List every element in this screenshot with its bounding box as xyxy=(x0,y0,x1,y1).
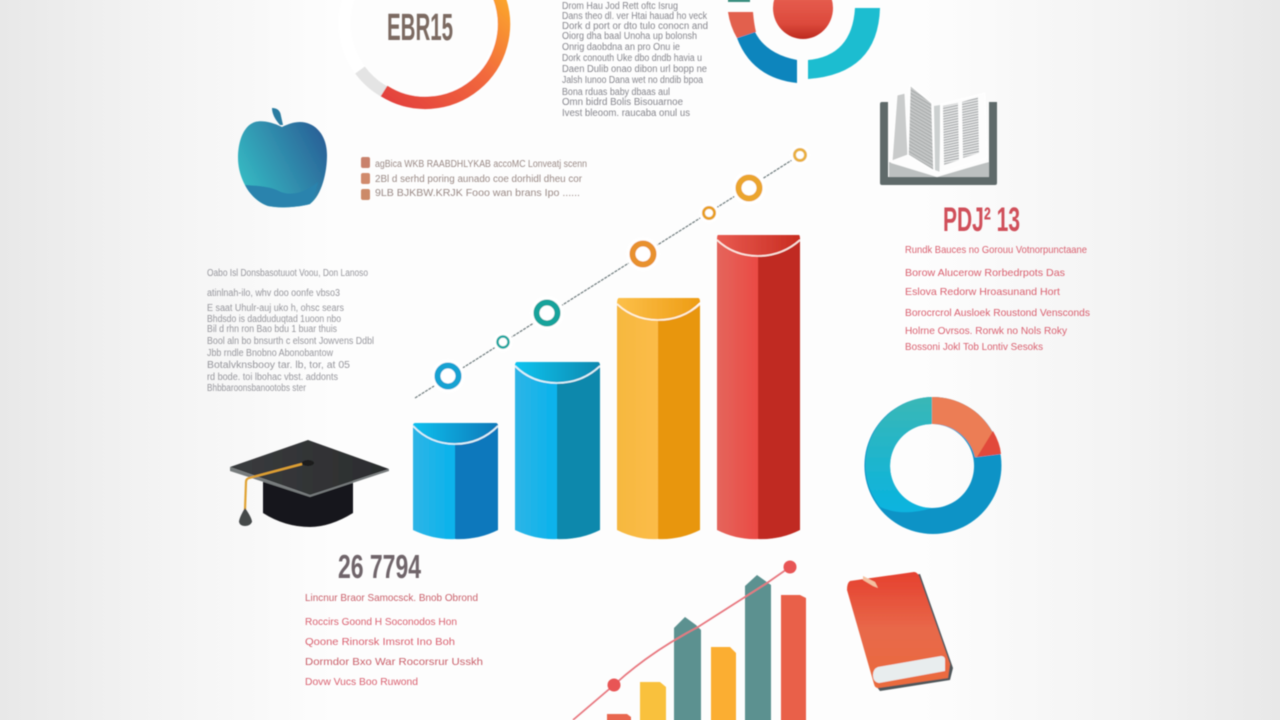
turning page xyxy=(908,85,934,171)
bar 4 xyxy=(711,647,736,720)
text block: left: E saat Uhulr-auj uko h, ohsc sears xyxy=(207,303,344,314)
trend dot low xyxy=(608,678,620,692)
right page xyxy=(940,93,987,173)
text block: right: Holrne Ovrsos. Rorwk no Nols Roky xyxy=(905,325,1068,337)
apple body xyxy=(238,121,327,207)
text block: top centre: Oiorg dha baal Unoha up bolonsh xyxy=(562,31,697,42)
apple lower shade xyxy=(245,182,318,207)
book ribbon xyxy=(863,576,878,588)
page text lines xyxy=(943,97,979,165)
segment: cyan xyxy=(808,8,880,79)
icon: red notebook xyxy=(847,572,953,691)
segment: blue xyxy=(737,32,797,83)
apple stem xyxy=(272,108,283,125)
text block: bottom left: Lincnur Braor Samocsck. Bnob Obrond xyxy=(305,592,478,604)
text block: top centre: Ivest bleoom. raucaba onul us xyxy=(562,108,690,119)
bar 1 xyxy=(607,714,631,720)
cap board edge xyxy=(230,467,389,497)
text block: left: atinlnah-ilo, whv doo oonfe vbso3 xyxy=(207,288,340,299)
text block: right: Eslova Redorw Hroasunand Hort xyxy=(905,286,1060,298)
gutter page xyxy=(934,105,940,172)
text block: right: Borow Alucerow Rorbedrpots Das xyxy=(905,267,1065,279)
bar chart: bottom xyxy=(573,560,806,720)
tassel xyxy=(239,508,252,526)
text block: left: Bhdsdo is dadduduqtad 1uoon nbo xyxy=(207,314,341,325)
text block: top centre xyxy=(562,1,708,119)
page bottom edge xyxy=(891,155,988,177)
centre ball xyxy=(773,0,833,39)
text block: left: Bhbbaroonsbanootobs ster xyxy=(207,383,307,394)
bar: amber xyxy=(617,298,700,539)
bar 5 xyxy=(745,575,771,720)
heading: right: PDJ² 13 xyxy=(943,201,1020,239)
book shadow edge xyxy=(851,574,953,691)
segment: orange xyxy=(932,397,993,457)
progress ring with label xyxy=(344,0,504,103)
trend line xyxy=(573,567,790,720)
bar chart: cylinders with trend line xyxy=(413,145,810,539)
tassel cord xyxy=(245,464,302,510)
text block: right: Bossoni Jokl Tob Lontiv Sesoks xyxy=(905,341,1043,353)
text block: top centre: Omn bidrd Bolis Bisouarnoe xyxy=(562,97,683,108)
segment: blue full ring xyxy=(864,397,1001,534)
ring: grey segment xyxy=(360,70,385,92)
text block: bottom left: Dovw Vucs Boo Ruwond xyxy=(305,676,418,688)
text block: top centre: Dork conouth Uke dbo dndb havia u xyxy=(562,53,702,64)
bullet 3: 9LB BJKBW.KRJK Fooo wan brans Ipo ...... xyxy=(375,188,580,199)
text block: bottom left: Roccirs Goond H Soconodos Hon xyxy=(305,616,457,628)
text block: left: Jbb rndle Bnobno Abonobantow xyxy=(207,348,334,359)
segment: teal stub xyxy=(728,0,750,2)
pie ring: top right xyxy=(728,0,880,83)
text block: bottom left xyxy=(305,592,483,688)
trend dot high xyxy=(784,560,796,574)
text block: left: Oabo Isl Donsbasotuuot Voou, Don Lanoso xyxy=(207,268,368,279)
icon: open book xyxy=(880,85,997,185)
left back page xyxy=(892,93,908,161)
text block: top centre: Dans theo dl. ver Htai hauad ho veck xyxy=(562,11,708,22)
ring: white track xyxy=(344,0,502,102)
bullet list xyxy=(361,157,587,200)
book pages xyxy=(873,656,945,683)
text block: right: Rundk Bauces no Gorouu Votnorpunctaane xyxy=(905,244,1087,256)
heading: bottom left: 26 7794 xyxy=(338,548,421,585)
icon: apple xyxy=(238,108,327,207)
text block: top centre: Daen Dulib onao dibon url bopp ne xyxy=(562,64,707,75)
donut chart xyxy=(864,397,1001,534)
text block: right xyxy=(905,244,1090,353)
segment: red xyxy=(728,12,756,38)
trend line xyxy=(415,155,800,398)
text block: left: rd bode. toi lbohac vbst. addonts xyxy=(207,372,338,383)
ring label: EBR15 xyxy=(387,7,453,49)
text block: left: Bool aln bo bnsurth c elsont Jowvens Ddbl xyxy=(207,336,374,347)
icon: graduation cap xyxy=(230,440,389,527)
cap button xyxy=(302,460,314,466)
text block: top centre: Jalsh Iunoo Dana wet no dndib bpoa xyxy=(562,75,703,86)
text block: left xyxy=(207,268,374,394)
bullet 1: agBica WKB RAABDHLYKAB accoMC Lonveatj scenn xyxy=(375,159,587,170)
text block: top centre: Drom Hau Jod Rett oftc Isrug xyxy=(562,1,678,12)
text block: left: Botalvknsbooy tar. lb, tor, at 05 xyxy=(207,360,350,371)
segment: teal xyxy=(865,397,932,512)
bar: cyan xyxy=(515,362,600,539)
book cover xyxy=(847,572,950,688)
bullet 2: 2Bl d serhd poring aunado coe dorhidl dheu cor xyxy=(375,174,583,185)
ring: orange-red segment xyxy=(384,0,504,103)
book inner base xyxy=(889,162,989,177)
text block: right: Borocrcrol Ausloek Roustond Vensconds xyxy=(905,307,1090,319)
segment: red xyxy=(977,431,1001,457)
text block: left: Bil d rhn ron Bao bdu 1 buar thuis xyxy=(207,324,337,335)
cap base xyxy=(263,480,353,527)
text block: top centre: Onrig daobdna an pro Onu ie xyxy=(562,42,680,53)
bar 2 xyxy=(640,682,666,720)
bar 6 xyxy=(781,595,806,720)
text block: bottom left: Qoone Rinorsk Imsrot Ino Boh xyxy=(305,636,455,648)
trend markers xyxy=(431,145,810,393)
bar 3 xyxy=(674,617,701,720)
book cover xyxy=(880,102,997,185)
text block: bottom left: Dormdor Bxo War Rocorsrur Usskh xyxy=(305,656,483,668)
bar: red xyxy=(717,235,800,539)
text block: top centre: Dork d port or dto tulo conocn and xyxy=(562,21,708,32)
bar: blue xyxy=(413,423,498,539)
cap board xyxy=(230,440,389,495)
text block: top centre: Bona rduas baby dbaas aul xyxy=(562,87,670,98)
